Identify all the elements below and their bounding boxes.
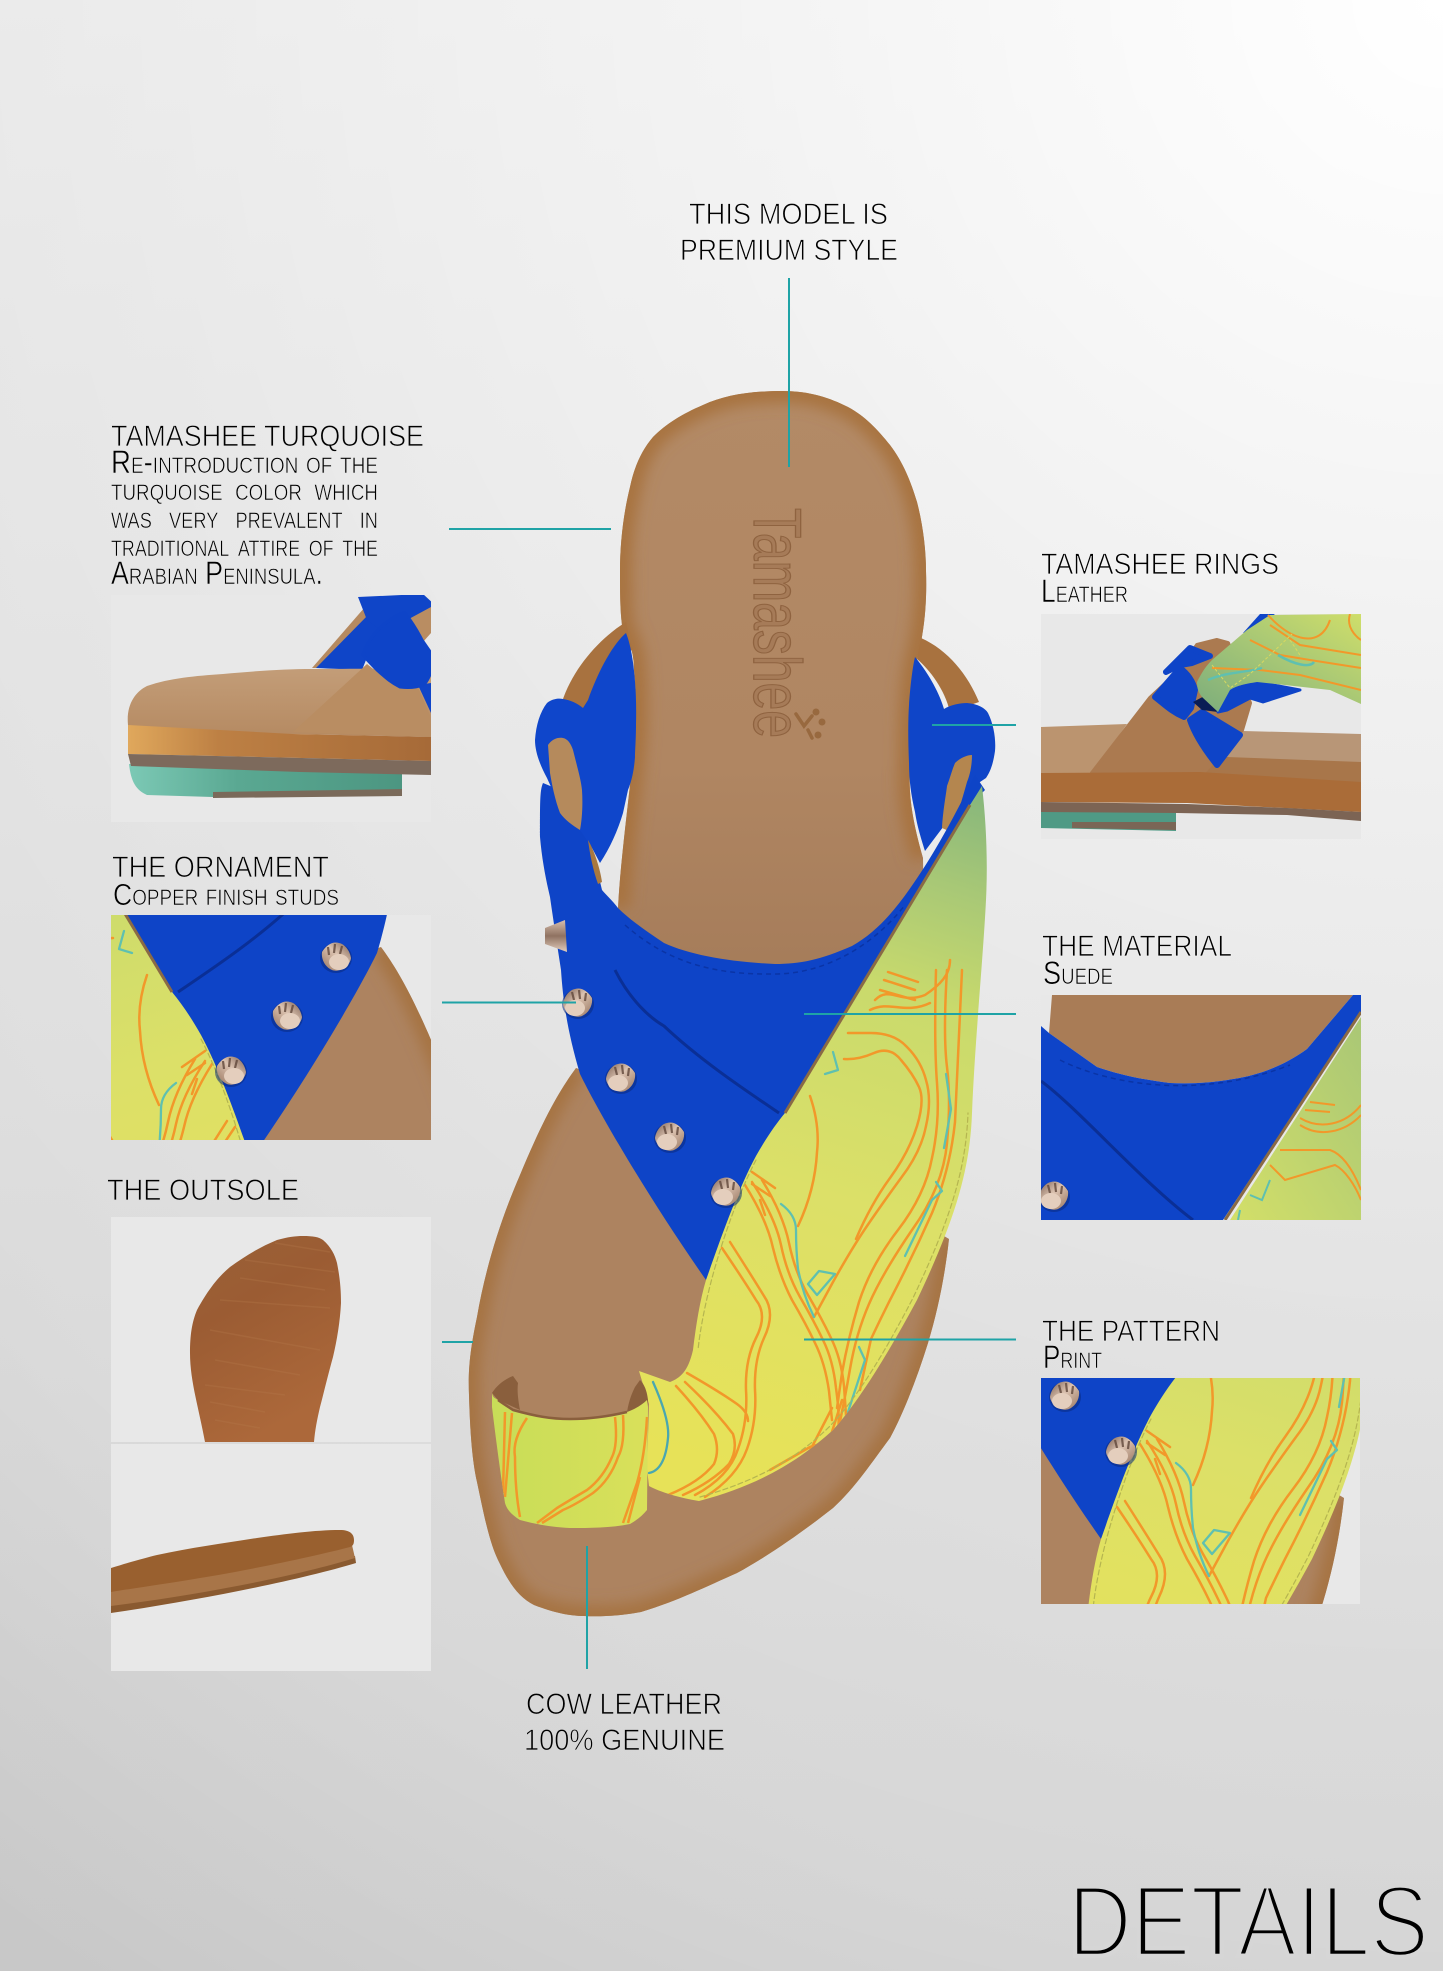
heading: premium style [680,198,898,267]
panel: rings close-up [1041,614,1361,839]
leader line: material [804,1013,1016,1015]
leader line: premium style [788,278,790,467]
embossed brand logo [739,508,826,738]
text block: Tamashee Turquoise: TAMASHEE TURQUOISE [111,420,424,453]
heading: the material: THE MATERIAL [1042,930,1232,963]
text block: Tamashee Turquoise [111,420,424,591]
heading: cow leather [524,1688,725,1757]
heading: the ornament: THE ORNAMENT [112,851,329,884]
heading: Tamashee rings [1041,548,1279,609]
leader line: cow leather [586,1546,588,1669]
heading: the pattern [1042,1315,1220,1375]
text block: Tamashee Turquoise: Arabian Peninsula. [111,555,323,591]
heading: the pattern: Print [1043,1339,1102,1375]
panel: outsole side view [111,1444,431,1671]
leader line: pattern [804,1338,1016,1340]
heading: the material [1042,930,1232,991]
heading: the outsole: THE OUTSOLE [107,1174,299,1207]
heading: Tamashee rings: TAMASHEE RINGS [1041,548,1279,581]
heading: premium style: THIS MODEL IS [689,198,888,231]
text block: Tamashee Turquoise: traditional attire of the [111,528,378,563]
heading: premium style: PREMIUM STYLE [680,234,898,267]
heading: the pattern: THE PATTERN [1042,1315,1220,1348]
panel: ornament close-up [111,915,431,1140]
leader line: rings [932,724,1016,726]
heading: Tamashee rings: Leather [1041,573,1128,609]
text block: Tamashee Turquoise: turquoise color which [111,472,378,507]
leader line: turquoise [449,528,611,530]
heading: cow leather: 100% GENUINE [524,1724,725,1757]
main sandal illustration [460,380,995,1630]
embossed brand logo: Tamashee [739,508,815,738]
panel: suede close-up [1038,995,1361,1220]
text block: Tamashee Turquoise: was very prevalent in [111,500,378,535]
leader line: ornament [442,1002,576,1004]
heading: the ornament: Copper finish studs [113,877,339,912]
text block: Tamashee Turquoise: Re-introduction of the [111,444,378,480]
panel: print close-up [1041,1378,1360,1604]
heading: the material: Suede [1043,955,1113,991]
leader line: outsole [442,1341,473,1343]
heading: the ornament [112,851,339,912]
panel: outsole bottom view [111,1217,431,1442]
panel: heel side view [128,595,431,798]
heading: cow leather: COW LEATHER [526,1688,722,1721]
